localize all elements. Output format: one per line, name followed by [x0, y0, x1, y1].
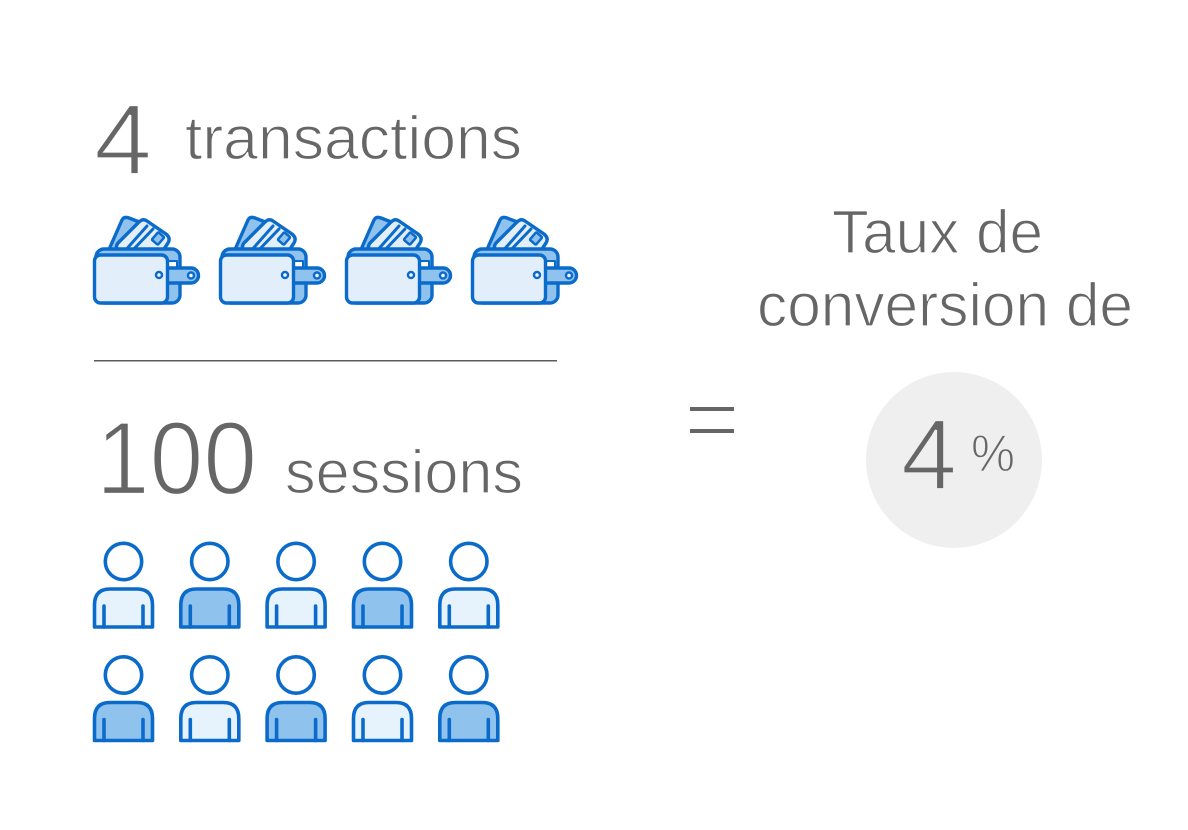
icons: four wallets — [94, 217, 576, 303]
number 4: 4 — [94, 84, 152, 196]
icon: wallet 2 — [220, 217, 324, 303]
badge circle — [866, 372, 1042, 548]
icon: person row 2 col 1 — [94, 657, 152, 740]
label transactions: transactions — [185, 104, 522, 172]
fraction line — [94, 360, 557, 362]
icon: person row 1 col 4 — [354, 543, 412, 627]
icon: wallet 3 — [346, 217, 450, 303]
result badge: 4 % — [866, 372, 1042, 548]
equals sign — [690, 407, 734, 433]
heading: 100 sessions — [96, 401, 523, 517]
icon: person row 2 col 5 — [440, 657, 498, 740]
icon: person row 2 col 3 — [267, 657, 325, 740]
icons: ten people — [94, 543, 498, 740]
icon: person row 1 col 2 — [181, 543, 239, 627]
icon: person row 1 col 5 — [440, 543, 498, 627]
heading: 4 transactions — [94, 84, 522, 196]
percent sign: % — [971, 425, 1015, 483]
icon: wallet 1 — [94, 217, 198, 303]
label sessions: sessions — [285, 438, 523, 506]
value 4: 4 — [901, 399, 957, 511]
icon: person row 1 col 3 — [267, 543, 325, 627]
icon: wallet 4 — [472, 217, 576, 303]
icon: person row 2 col 4 — [354, 657, 412, 740]
result heading — [757, 198, 1133, 339]
number 100: 100 — [96, 401, 257, 517]
icon: person row 2 col 2 — [181, 657, 239, 740]
text line: Taux de: Taux de — [832, 198, 1043, 266]
icon: person row 1 col 1 — [94, 543, 152, 627]
text line: conversion de: conversion de — [757, 271, 1133, 339]
